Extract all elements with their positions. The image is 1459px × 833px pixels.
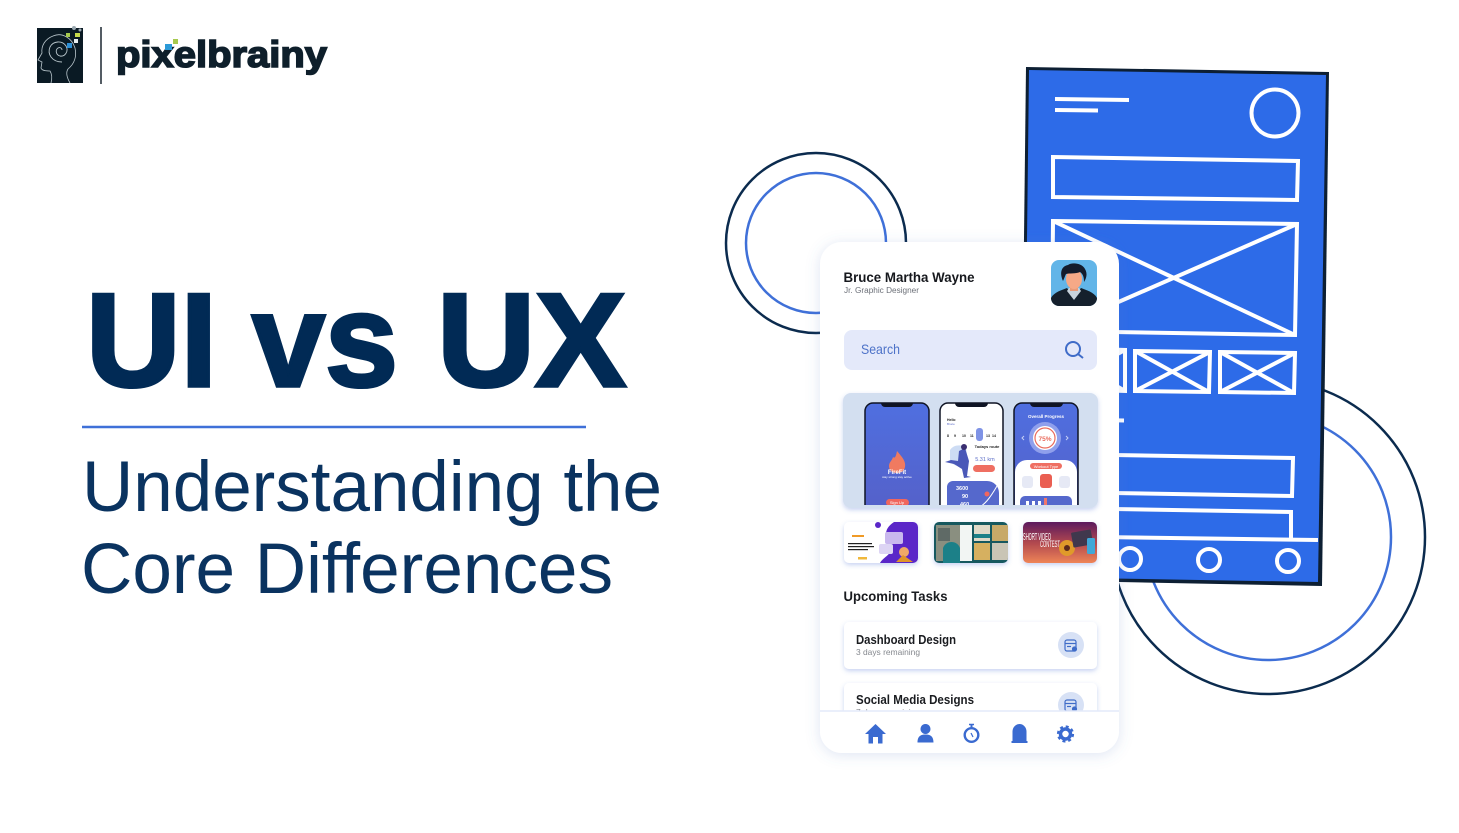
title: UX (437, 267, 626, 415)
task list (842, 622, 1100, 710)
wireframe: banner box (1053, 157, 1298, 200)
title: vs (252, 267, 398, 415)
phone 3: Overall Progress (1028, 414, 1065, 419)
phone 2: 9 (954, 434, 956, 438)
bottom navigation (820, 711, 1119, 753)
wireframe phone (1020, 67, 1329, 586)
task card: dashboard design: Dashboard Design (856, 633, 956, 647)
phone 3: 75% (1038, 436, 1052, 443)
icon: stopwatch (965, 724, 978, 742)
wireframe: avatar circle (1252, 90, 1298, 136)
title (86, 267, 626, 415)
thumbnail: short video contest: CONTEST (1040, 539, 1060, 549)
wireframe: thumbnail placeholders (1052, 348, 1295, 393)
icon: bell (1012, 724, 1028, 743)
thumbnail: short video contest: SHORT VIDEO (1023, 532, 1051, 543)
logo (37, 26, 327, 84)
icon: calendar (1065, 640, 1076, 651)
phone 3 (1014, 403, 1078, 515)
wireframe: nav circles (1119, 548, 1299, 572)
phone 2: 13 (986, 434, 990, 438)
phone 1: Sign Up (890, 500, 905, 505)
phone 2: 3600 (956, 486, 968, 492)
phone 2: 11 (970, 434, 974, 438)
wordmark: pixelbrainy (116, 34, 327, 75)
task card: social media designs: 7 days remaining (856, 707, 920, 717)
wireframe: image placeholder (1052, 221, 1297, 335)
phone 2: 5.31 km (975, 457, 995, 463)
phone 2: 460 (960, 502, 969, 508)
decorative circles: right (1111, 380, 1425, 694)
phone 2: 90 (962, 494, 968, 500)
phone 2: Bruce (947, 422, 955, 426)
icon: home (865, 724, 886, 744)
phone 2: 14 (992, 434, 996, 438)
icon: calendar (1065, 700, 1076, 711)
featured banner (843, 393, 1098, 518)
profile name: Bruce Martha Wayne (844, 269, 975, 285)
subtitle (81, 448, 662, 609)
thumbnail: purple landing page (844, 522, 918, 563)
phone 1 (865, 403, 929, 515)
phone 2: Todays route (975, 444, 1000, 449)
wireframe: list rows (1030, 420, 1318, 540)
task card: social media designs (842, 682, 1100, 710)
icon: head with spiral (37, 26, 83, 83)
phone 3: Workout Type (1034, 464, 1059, 469)
profile role: Jr. Graphic Designer (844, 286, 919, 295)
task card: dashboard design (844, 622, 1097, 669)
phone 2: 8 (947, 434, 949, 438)
phone 1: stay strong stay active (882, 475, 912, 479)
avatar (1051, 260, 1097, 306)
phone 2 (940, 403, 1003, 518)
heading: upcoming tasks: Upcoming Tasks (844, 588, 948, 604)
icon: settings (1058, 726, 1073, 742)
app card (820, 242, 1119, 753)
task card: dashboard design: 3 days remaining (856, 647, 920, 657)
wireframe: header lines (1055, 99, 1129, 110)
icon: profile (918, 724, 934, 742)
decorative circles: left (726, 153, 906, 333)
subtitle: Core Differences (81, 530, 613, 609)
thumbnail: teal photo grid (934, 522, 1008, 563)
icon: search (1066, 342, 1083, 358)
title: UI (86, 267, 217, 415)
phone 2: Hello (947, 418, 956, 422)
task card: social media designs: Social Media Designs (856, 693, 974, 707)
subtitle: Understanding the (82, 448, 662, 527)
search bar: Search (861, 341, 900, 357)
phone 1: FireFit (888, 470, 906, 476)
search bar (844, 330, 1097, 370)
phone 2: 10 (962, 434, 966, 438)
thumbnail: short video contest (1023, 522, 1097, 563)
